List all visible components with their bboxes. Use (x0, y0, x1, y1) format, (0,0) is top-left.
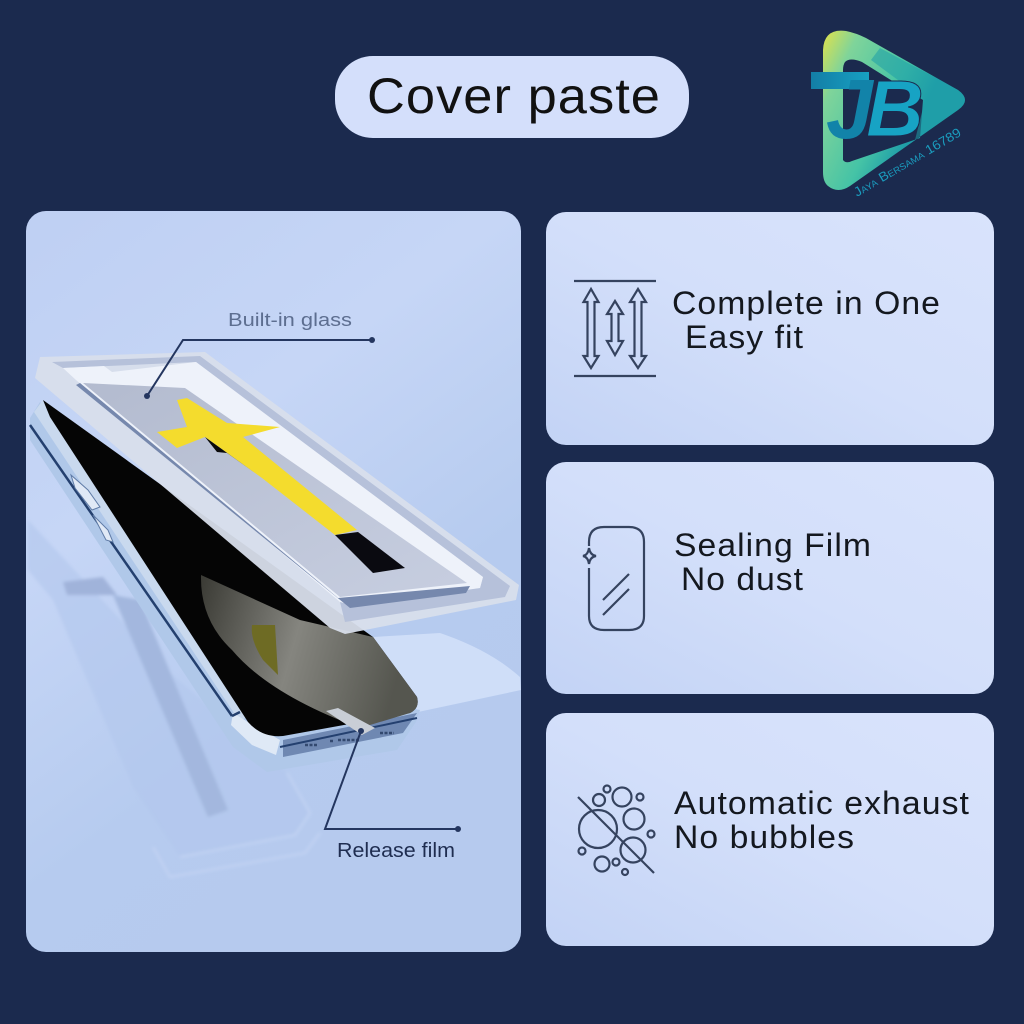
title pill (335, 56, 689, 138)
text: complete in one, easy fit (672, 285, 941, 355)
callout: built-in glass (144, 309, 375, 399)
panel: sealing film (546, 462, 994, 694)
text: automatic exhaust, no bubbles (674, 785, 970, 855)
yellow pull tab (157, 398, 357, 535)
metallic corner (231, 713, 280, 755)
text: automatic exhaust, no bubbles: No bubbles (674, 819, 855, 855)
phone frame (30, 402, 420, 772)
phone screen (43, 400, 418, 736)
side buttons (71, 475, 113, 542)
icon: bubbles (578, 786, 654, 875)
reflection of the phone and tray (29, 524, 228, 817)
black tag (335, 532, 405, 573)
logo: Jaya Bersama: J (826, 62, 875, 156)
logo: Jaya Bersama (811, 31, 965, 200)
panel: product illustration (26, 211, 521, 952)
black strip under tab (205, 437, 262, 478)
logo: Jaya Bersama: Jaya Bersama 16789 (851, 125, 964, 200)
text: sealing film, no dust: No dust (681, 561, 804, 597)
panel: complete in one (546, 212, 994, 445)
applicator tray (35, 352, 519, 634)
icon: sealing film (583, 527, 644, 630)
callout: release film: Release film (337, 840, 455, 862)
icon: arrows between lines (574, 281, 656, 376)
logo: Jaya Bersama: B (866, 64, 924, 153)
callout: built-in glass: Built-in glass (228, 309, 352, 330)
text: complete in one, easy fit: Complete in One (672, 285, 941, 321)
text: sealing film, no dust (674, 527, 872, 597)
phone ports (305, 733, 394, 745)
callout: release film (325, 728, 461, 862)
text: complete in one, easy fit: Easy fit (685, 319, 804, 355)
panel: automatic exhaust (546, 713, 994, 946)
release film tab (326, 708, 375, 735)
text: sealing film, no dust: Sealing Film (674, 527, 872, 563)
text: automatic exhaust, no bubbles: Automatic exhaust (674, 785, 970, 821)
phone (30, 400, 420, 772)
release film sheet (373, 633, 521, 712)
built-in glass (83, 383, 467, 597)
title pill: Cover paste (367, 68, 661, 124)
